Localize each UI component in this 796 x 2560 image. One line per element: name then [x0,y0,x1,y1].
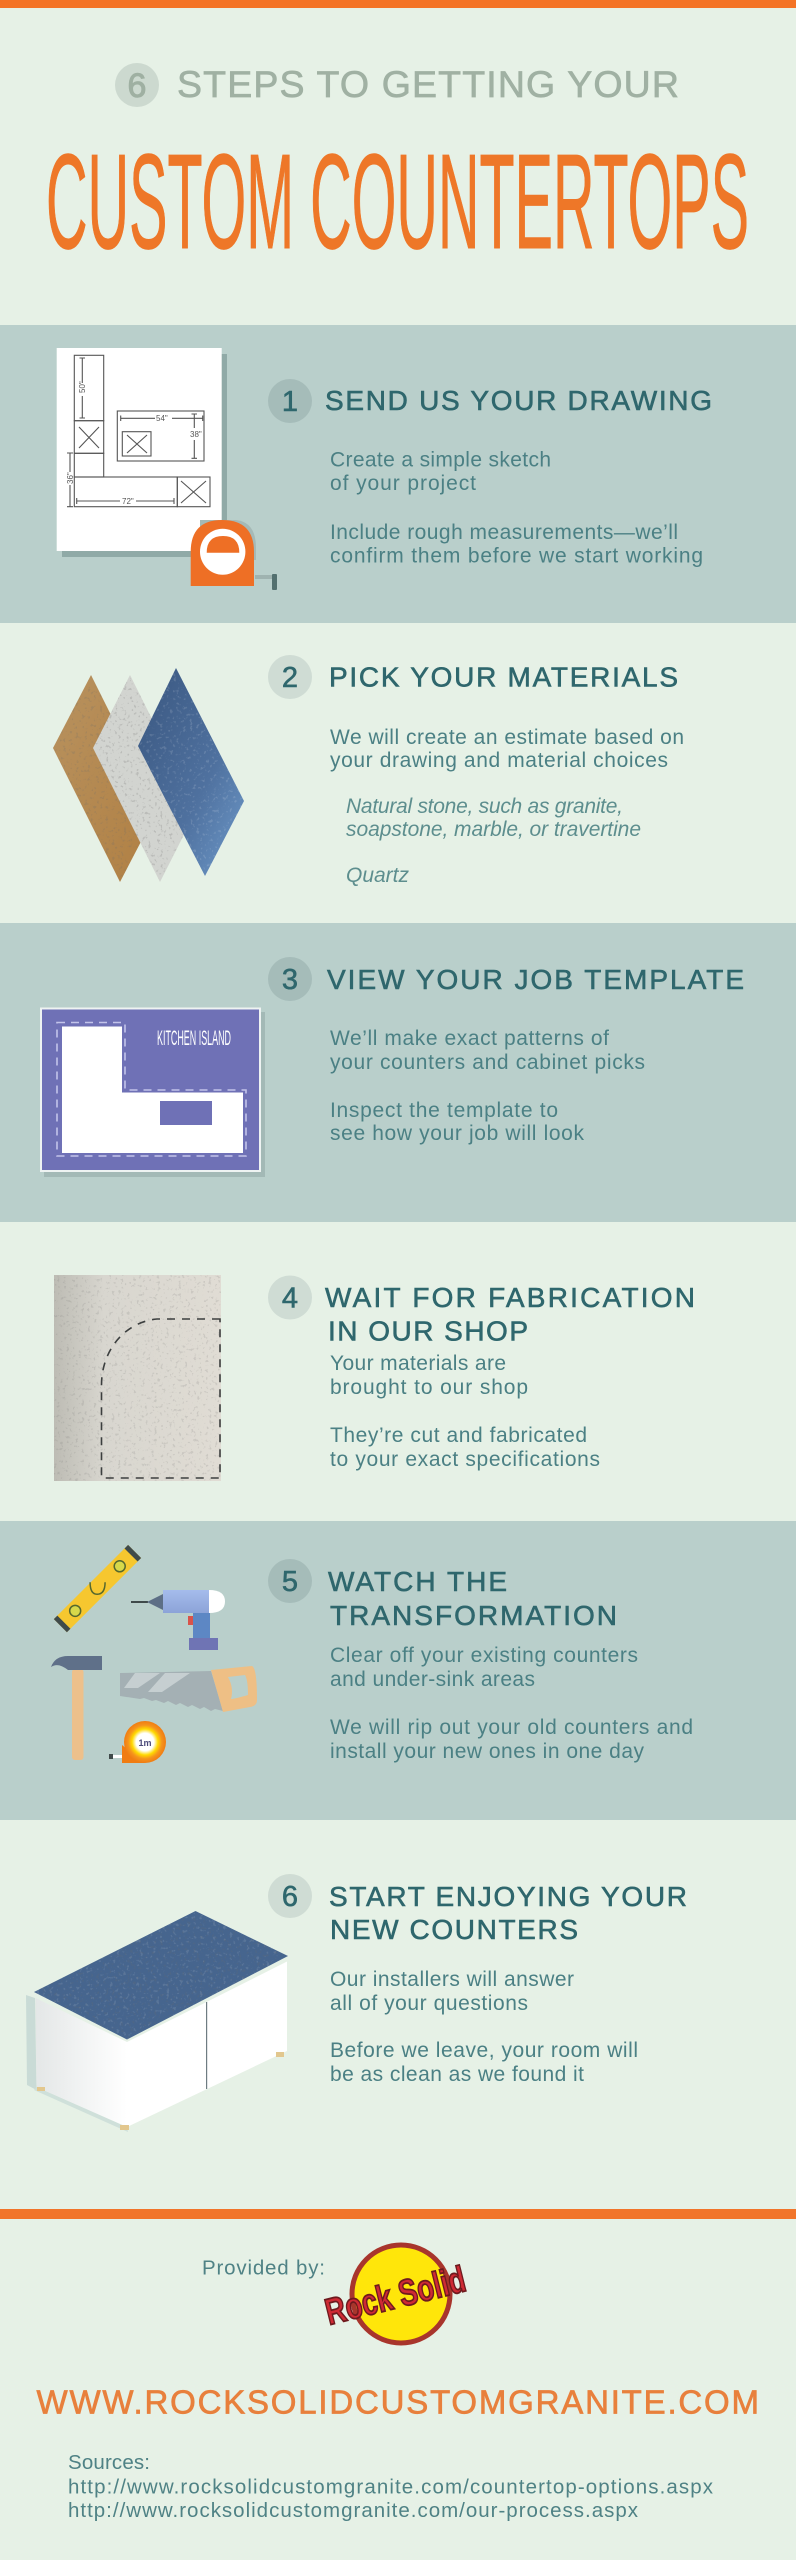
icon: tape measure [191,520,277,590]
number badge: 1: 1 [282,386,298,418]
text: provided by: Provided by: [202,2256,325,2280]
icon: job template [40,1008,265,1177]
header [46,63,749,277]
icon: small tape measure: 1m [138,1738,152,1748]
number badge: 6 [115,63,159,107]
heading: step 4: IN OUR SHOP [328,1316,528,1347]
text: step 6 body: be as clean as we found it [330,2063,584,2086]
footer [36,2245,759,2522]
icon: job template: KITCHEN ISLAND [157,1027,231,1050]
text: step 4 body [330,1352,600,1471]
number badge: 2 [268,655,312,699]
panel: step 3 [0,923,796,1222]
heading: step 2: PICK YOUR MATERIALS [329,661,678,692]
icon: floor plan drawing [57,348,227,557]
text: step 2 body: Quartz [346,864,410,887]
website url: WWW.ROCKSOLIDCUSTOMGRANITE.COM [36,2384,759,2421]
text: step 3 body: Inspect the template to [330,1099,558,1122]
text: step 1 body: Include rough measurements—we’ll [330,521,678,544]
number badge: 1 [268,379,312,423]
text: step 2 body [330,726,684,887]
number badge: 5 [268,1559,312,1603]
number badge: 6: 6 [128,67,146,105]
divider: orange bar [0,2209,796,2219]
subtitle: STEPS TO GETTING YOUR [177,63,679,105]
text: step 5 body: and under-sink areas [330,1668,535,1691]
text: step 3 body [330,1027,645,1145]
number badge: 3 [268,957,312,1001]
heading: step 6 [329,1881,687,1945]
number badge: 6 [268,1874,312,1918]
icon: drill [131,1590,225,1650]
text: step 1 body: Create a simple sketch [330,448,551,472]
text: step 3 body: We’ll make exact patterns of [330,1027,609,1050]
logo: Rock Solid: Rock Solid [321,2258,470,2333]
text: step 1 body: of your project [330,472,476,495]
icon: cabinet with stone counter [26,1911,288,2132]
heading: step 5: TRANSFORMATION [330,1600,617,1631]
text: step 2 body: your drawing and material choices [330,749,668,772]
text: step 5 body: We will rip out your old counters and [330,1716,693,1739]
icon: spirit level [53,1545,141,1632]
text: step 2 body: Natural stone, such as granite, [346,795,623,818]
logo: Rock Solid [321,2245,470,2343]
heading: step 3: VIEW YOUR JOB TEMPLATE [327,964,744,995]
icon: floor plan drawing: 72" [122,497,134,506]
icon: saw [120,1666,257,1712]
number badge: 2: 2 [282,662,298,694]
heading: step 1: SEND US YOUR DRAWING [325,385,712,416]
text: step 6 body: all of your questions [330,1992,528,2015]
heading: step 6: START ENJOYING YOUR [329,1881,687,1912]
sources [68,2451,714,2522]
panel: step 6 [26,1874,687,2132]
panel: step 2 [53,655,684,887]
number badge: 6: 6 [282,1881,298,1913]
text: step 4 body: They’re cut and fabricated [330,1424,587,1447]
icon: floor plan drawing: 38" [190,430,202,439]
text: step 4 body: to your exact specifications [330,1448,600,1471]
text: step 6 body: Our installers will answer [330,1968,574,1991]
number badge: 4 [268,1276,312,1320]
text: step 1 body: confirm them before we start working [330,544,703,568]
number badge: 3: 3 [282,964,298,996]
icon: floor plan drawing: 54" [156,414,168,423]
panel: step 1 [0,325,796,623]
text: step 6 body [330,1968,638,2086]
icon: hammer [51,1656,102,1760]
number badge: 4: 4 [282,1282,298,1314]
text: step 4 body: Your materials are [330,1352,506,1375]
heading: step 4 [325,1282,695,1347]
sources: Sources: [68,2451,150,2474]
heading: step 5 [328,1566,617,1631]
text: step 5 body [330,1644,693,1763]
icon: stone samples [53,668,244,882]
sources: http://www.rocksolidcustomgranite.com/our-process.aspx [68,2499,639,2522]
text: step 6 body: Before we leave, your room will [330,2039,638,2062]
text: step 2 body: We will create an estimate based on [330,726,684,749]
heading: step 6: NEW COUNTERS [330,1914,578,1945]
top orange bar [0,0,796,8]
icon: stone slab with cut line [54,1275,221,1481]
text: step 5 body: install your new ones in one day [330,1740,644,1763]
icon: floor plan drawing: 50" [78,381,87,393]
sources: http://www.rocksolidcustomgranite.com/countertop-options.aspx [68,2476,714,2498]
icon: floor plan drawing: 36" [66,472,75,484]
text: step 4 body: brought to our shop [330,1376,528,1399]
text: step 5 body: Clear off your existing counters [330,1644,638,1667]
number badge: 5: 5 [282,1566,298,1598]
text: step 1 body [330,448,703,568]
text: step 2 body: soapstone, marble, or travertine [346,818,641,841]
heading: step 5: WATCH THE [328,1566,507,1597]
panel: step 5 [0,1521,796,1820]
icon: small tape measure [109,1721,166,1763]
text: step 3 body: see how your job will look [330,1122,584,1145]
heading: step 4: WAIT FOR FABRICATION [325,1282,695,1313]
panel: step 4 [54,1275,695,1481]
text: step 3 body: your counters and cabinet picks [330,1051,645,1074]
